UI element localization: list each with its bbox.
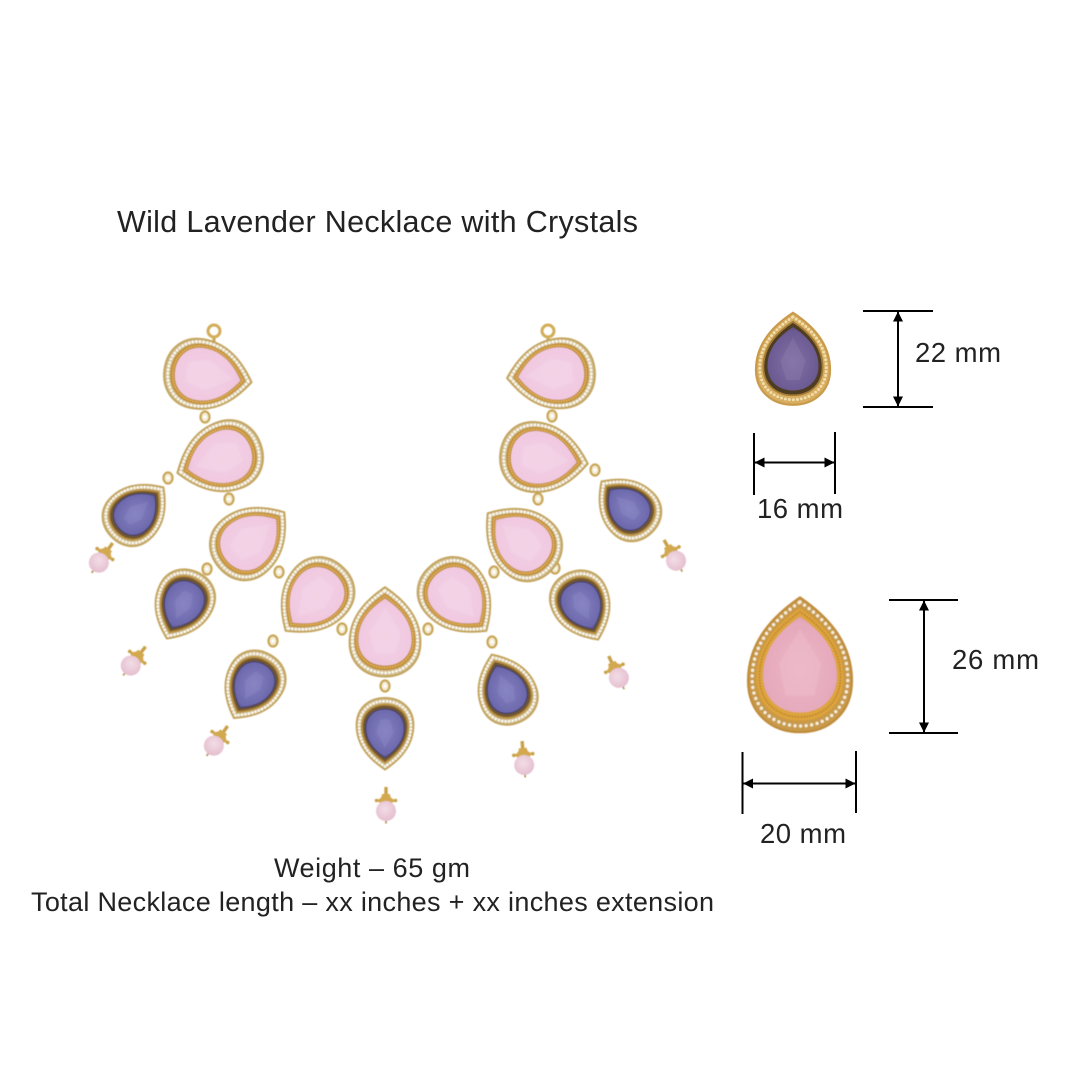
dimension: 20 mm width bbox=[742, 751, 856, 814]
clasp ring left bbox=[208, 325, 220, 346]
label: 26 mm: 26 mm bbox=[952, 644, 1039, 675]
detail photo: pink stone bbox=[748, 597, 852, 732]
pink stone centre bbox=[350, 587, 420, 677]
weight text: Weight – 65 gm bbox=[274, 853, 470, 883]
purple stone centre bbox=[356, 698, 414, 770]
pink stone right 3 bbox=[466, 487, 575, 594]
bead right c bbox=[511, 740, 537, 778]
label: 22 mm: 22 mm bbox=[915, 337, 1001, 368]
pink stone right 4 bbox=[405, 544, 512, 653]
necklace length text: Total Necklace length – xx inches + xx inches extension bbox=[31, 887, 714, 917]
bead centre bbox=[375, 787, 397, 824]
purple stone left b bbox=[141, 560, 224, 651]
dimension: 26 mm height bbox=[889, 600, 958, 733]
purple stone right a bbox=[581, 461, 672, 552]
dimension: 16 mm width bbox=[754, 432, 835, 495]
dimension: 22 mm height bbox=[863, 311, 933, 407]
bead drops bbox=[82, 534, 692, 824]
bead left a bbox=[82, 536, 122, 579]
detail photo: purple stone bbox=[756, 313, 830, 405]
bead left c bbox=[197, 719, 237, 762]
purple stones bbox=[92, 461, 672, 770]
label: 16 mm: 16 mm bbox=[757, 493, 843, 524]
pink stone left 4 bbox=[260, 544, 367, 653]
pink stone left 1 bbox=[159, 334, 257, 417]
necklace illustration bbox=[82, 325, 692, 824]
bead right b bbox=[598, 651, 634, 694]
pink stone right 1 bbox=[504, 335, 598, 413]
pink stones bbox=[159, 334, 598, 677]
pink stone right 2 bbox=[496, 418, 592, 498]
purple stone right b bbox=[541, 561, 624, 652]
chain links bbox=[164, 410, 600, 692]
purple stone left a bbox=[92, 466, 183, 557]
bead left b bbox=[114, 640, 154, 682]
purple stone right c bbox=[465, 644, 546, 733]
pink stone left 3 bbox=[197, 486, 306, 593]
purple stone left c bbox=[209, 640, 296, 733]
label: 20 mm: 20 mm bbox=[760, 818, 846, 849]
bead right a bbox=[654, 534, 692, 577]
clasp ring right bbox=[542, 325, 554, 346]
pink stone left 2 bbox=[166, 411, 272, 506]
title: Wild Lavender Necklace with Crystals bbox=[117, 205, 638, 239]
